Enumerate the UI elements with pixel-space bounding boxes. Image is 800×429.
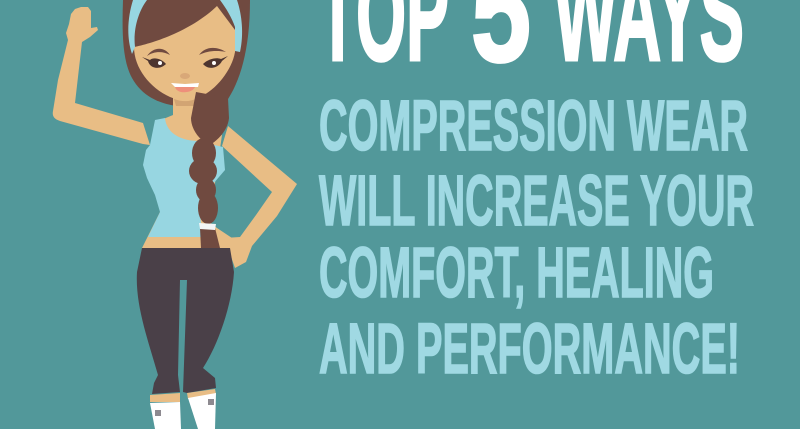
hair tie	[199, 223, 216, 230]
leggings	[137, 248, 234, 394]
fringe	[134, 0, 217, 47]
socks	[150, 393, 216, 429]
lower leg skin	[150, 389, 216, 402]
back hair	[123, 0, 250, 106]
mouth	[171, 83, 199, 92]
braid	[189, 92, 229, 248]
neck shadow	[174, 98, 198, 106]
arm on hip	[222, 126, 297, 268]
face	[134, 6, 235, 100]
headband	[128, 0, 242, 54]
woman illustration	[53, 0, 297, 429]
eyebrows	[147, 48, 226, 56]
tank top	[143, 118, 225, 237]
subtitle text	[319, 87, 754, 389]
torso and neck skin	[142, 98, 232, 248]
title	[318, 0, 744, 92]
eyes	[142, 56, 228, 68]
nose	[180, 73, 190, 79]
raised arm and hand	[53, 7, 150, 145]
